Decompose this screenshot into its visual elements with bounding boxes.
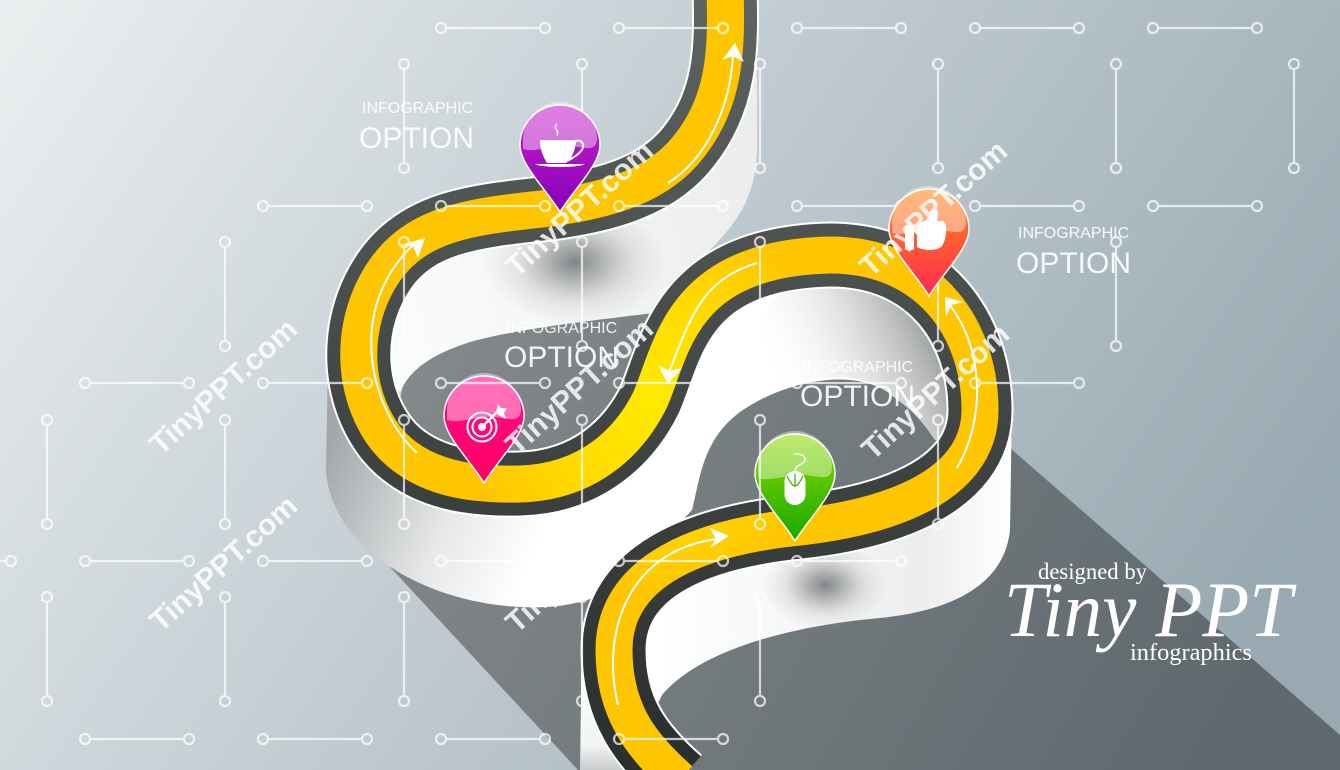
label: option right: OPTION xyxy=(1016,247,1131,280)
icon: coffee cup xyxy=(535,124,585,167)
arrow: middle xyxy=(658,263,757,384)
soft shadow: lower wall xyxy=(763,541,887,629)
watermarks: TinyPPT.com xyxy=(499,134,660,283)
direction arrows on road xyxy=(371,43,977,705)
watermarks: TinyPPT.com xyxy=(143,312,304,461)
icon: target xyxy=(468,404,507,442)
label: option top left xyxy=(359,100,474,155)
arrow: right bend xyxy=(945,297,977,468)
pin: purple coffee xyxy=(520,102,600,212)
wall: lower left loop and middle xyxy=(326,255,980,607)
pin: green mouse xyxy=(755,431,835,541)
watermarks: TinyPPT.com xyxy=(499,490,660,639)
brand signature: infographics xyxy=(1130,639,1252,666)
label: option lower centre: OPTION xyxy=(800,380,915,413)
winding road xyxy=(359,0,980,770)
label: option right: INFOGRAPHIC xyxy=(1018,225,1129,242)
arrow: bottom xyxy=(613,528,729,705)
icon: mouse xyxy=(784,454,806,505)
label: option top left: INFOGRAPHIC xyxy=(362,100,473,117)
extruded white road walls xyxy=(326,60,1012,770)
wall: upper bend xyxy=(360,60,757,392)
label: option lower centre xyxy=(800,359,915,413)
wall: bottom left leg xyxy=(580,630,660,770)
label: option centre xyxy=(504,320,619,374)
label: option top left: OPTION xyxy=(359,122,474,155)
label: option centre: INFOGRAPHIC xyxy=(506,320,617,337)
road surface xyxy=(359,0,980,770)
watermarks: TinyPPT.com xyxy=(499,312,660,461)
label: option centre: OPTION xyxy=(504,341,619,374)
brand signature: Tiny PPT xyxy=(1004,566,1297,653)
watermarks: TinyPPT.com xyxy=(143,489,304,638)
wall: lower right bend xyxy=(614,400,1012,720)
road outline xyxy=(359,0,980,770)
wall: inner right shading xyxy=(750,270,975,440)
pin: pink target xyxy=(444,373,524,483)
pin: orange thumbs up xyxy=(889,186,969,296)
watermarks: TinyPPT.com xyxy=(855,317,1016,466)
watermarks: TinyPPT.com xyxy=(853,134,1014,283)
yellow lane xyxy=(359,0,980,770)
arrow: top xyxy=(668,43,744,183)
soft shadow: upper wall xyxy=(483,200,667,324)
brand signature: designed by xyxy=(1038,559,1148,584)
watermarks xyxy=(143,134,1016,639)
arrow: left bend xyxy=(371,238,425,453)
icon: thumbs up xyxy=(905,209,946,250)
label: option right xyxy=(1016,225,1131,280)
long floor shadow xyxy=(380,280,1340,770)
label: option lower centre: INFOGRAPHIC xyxy=(802,359,913,376)
